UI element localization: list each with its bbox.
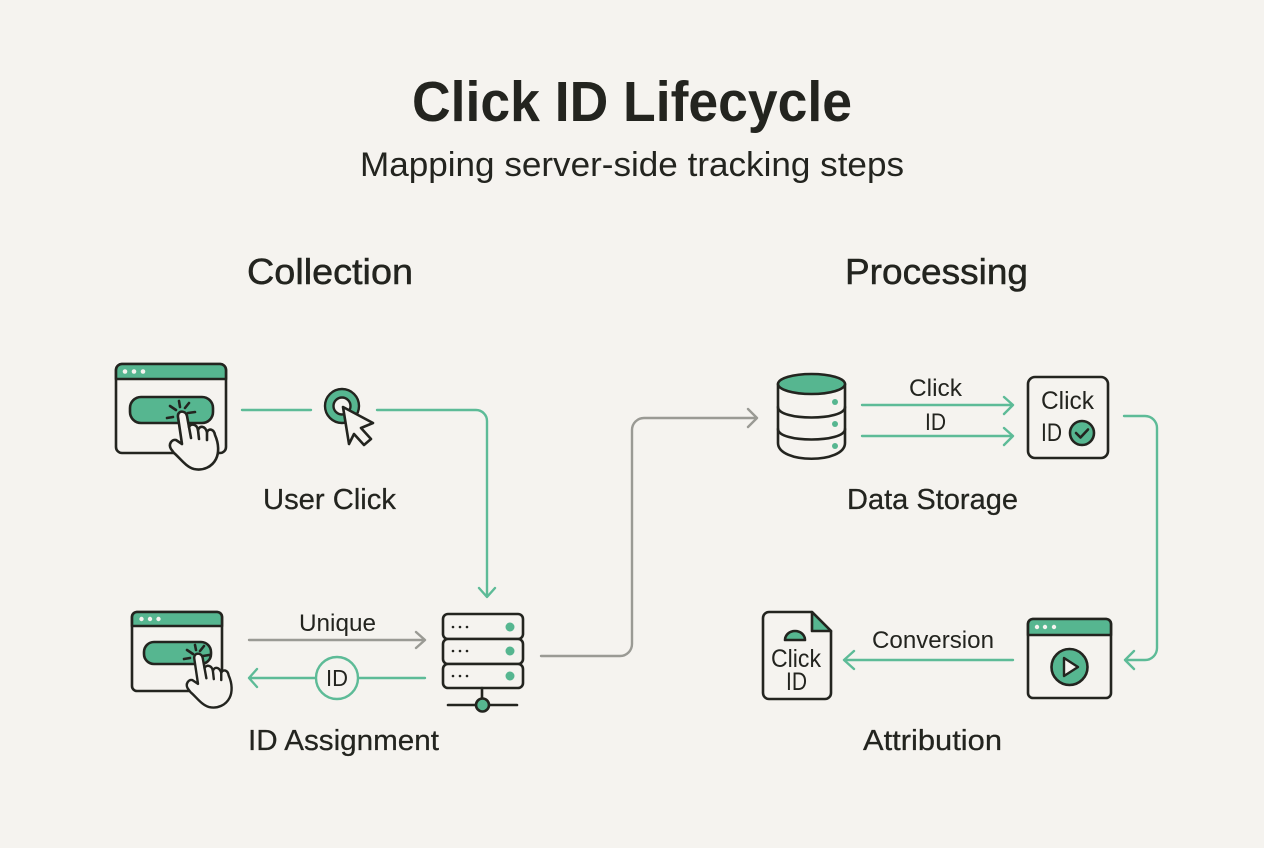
heading: Processing: Processing — [845, 251, 1028, 292]
label: Attribution: Attribution — [863, 725, 1002, 757]
arrow: cursor down to server — [377, 410, 495, 597]
label: Unique: Unique — [299, 610, 376, 637]
title: Click ID Lifecycle — [412, 70, 852, 134]
badge: ID — [316, 657, 358, 699]
label: Conversion: Conversion — [872, 627, 994, 654]
arrow: Collection to Processing — [541, 409, 757, 656]
icon: verified Click ID card: Click — [1041, 387, 1094, 415]
label: User Click: User Click — [263, 484, 396, 516]
step: Attribution — [763, 612, 1111, 757]
step: User Click — [116, 364, 396, 516]
arrow: Unique to server — [249, 632, 425, 648]
subtitle: Mapping server-side tracking steps — [360, 146, 904, 184]
icon: verified Click ID card: ID — [1041, 419, 1062, 447]
label: Data Storage: Data Storage — [847, 484, 1018, 516]
step: ID Assignment — [132, 610, 523, 757]
icon: browser window with click button — [116, 364, 226, 470]
icon: Click ID document: Click — [771, 645, 821, 673]
badge: ID: ID — [326, 665, 348, 691]
arrow: ID back to window — [249, 669, 425, 687]
arrow: ID — [862, 428, 1013, 445]
icon: conversion window with play button — [1028, 619, 1111, 698]
label: Click: Click — [909, 375, 963, 402]
label: ID: ID — [925, 409, 946, 436]
heading: Collection: Collection — [247, 251, 413, 292]
icon: click ripple and cursor — [325, 389, 373, 445]
step: Data Storage — [778, 374, 1108, 516]
icon: verified Click ID card — [1028, 377, 1108, 458]
icon: server rack — [443, 614, 523, 712]
arrow: Click — [862, 397, 1013, 414]
icon: browser window with click button — [132, 612, 232, 708]
arrow: card down to conversion window — [1124, 416, 1157, 669]
icon: database — [778, 374, 845, 459]
icon: Click ID document — [763, 612, 831, 699]
connector: window to cursor — [242, 409, 311, 411]
arrow: Conversion — [844, 651, 1013, 669]
icon: Click ID document: ID — [786, 668, 807, 696]
label: ID Assignment: ID Assignment — [248, 725, 439, 757]
